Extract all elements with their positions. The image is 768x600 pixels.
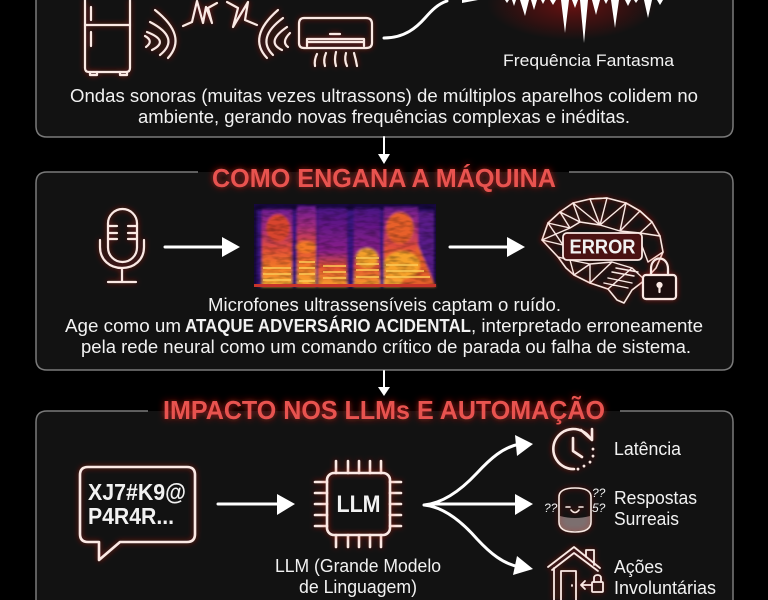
text: how it fools the machine description: , interpretado erroneamente: [471, 316, 703, 336]
icon: confused smart speaker: ??: [592, 486, 606, 500]
arrow: to phantom frequency: [384, 0, 478, 38]
label: respostas surreais: Surreais: [614, 509, 679, 529]
icon: lock: [643, 258, 676, 299]
icon: sound waves from refrigerator: [145, 10, 176, 58]
icon: confused smart speaker: [544, 486, 606, 532]
arrow: panel 1 to panel 2: [378, 137, 390, 164]
panel: how it fools the machine: [36, 163, 733, 370]
icon: LLM chip: LLM: [336, 491, 380, 518]
label: ações involuntárias: Ações: [614, 557, 663, 577]
text: how it fools the machine description: [65, 295, 703, 357]
ERROR tag: ERROR: [570, 236, 636, 258]
arrow: spectrogram to brain: [450, 237, 525, 257]
icon: garbled text speech bubble: [80, 467, 195, 560]
text: how it fools the machine description: Age como um: [65, 316, 181, 336]
icon: LLM chip: [315, 461, 401, 547]
text: how it fools the machine description: pela rede neural como um comando crítico de parada ou falha de sistema.: [81, 337, 691, 357]
text: phantom frequency description: Ondas sonoras (muitas vezes ultrassons) de múltiplos aparelhos colidem no: [70, 86, 698, 106]
label: ações involuntárias: Involuntárias: [614, 578, 716, 598]
icon: garbled text speech bubble: P4R4R...: [88, 503, 174, 529]
icon: garbled text speech bubble: XJ7#K9@: [88, 479, 186, 505]
label: LLM: de Linguagem): [299, 577, 417, 597]
arrow: panel 2 to panel 3: [378, 371, 390, 396]
icon: confused smart speaker: 5?: [592, 501, 606, 515]
text: phantom frequency description: ambiente, gerando novas frequências complexas e inéditas.: [138, 107, 630, 127]
icon: confused smart speaker: ??: [544, 501, 558, 515]
label: ações involuntárias: [614, 557, 716, 598]
icon: house with lock: [548, 547, 603, 600]
arrow: text to LLM: [218, 494, 295, 515]
label: latência: Latência: [614, 439, 682, 459]
heading: como engana a máquina: COMO ENGANA A MÁQUINA: [212, 163, 556, 193]
icon: refrigerator: [85, 0, 130, 75]
heading: impacto nos LLMs e automação: IMPACTO NOS LLMs E AUTOMAÇÃO: [163, 395, 605, 425]
icon: air conditioner: [299, 18, 372, 66]
icon: colliding sound spikes: [183, 1, 257, 27]
text: how it fools the machine description: Microfones ultrassensíveis captam o ruído.: [208, 295, 561, 315]
arrows: LLM to three outcomes: [424, 435, 533, 575]
label: LLM: [275, 556, 441, 597]
label: phantom frequency: Frequência Fantasma: [503, 51, 675, 70]
panel: how phantom frequency forms: [36, 0, 733, 137]
label: LLM: LLM (Grande Modelo: [275, 556, 441, 576]
text: how it fools the machine description: ATAQUE ADVERSÁRIO ACIDENTAL: [185, 315, 471, 336]
label: respostas surreais: [614, 488, 697, 529]
arrow: microphone to spectrogram: [165, 237, 240, 257]
icon: neural network brain with error: [542, 198, 676, 303]
chart: spectrogram: [254, 204, 436, 287]
icon: microphone: [100, 209, 144, 282]
icon: sound waves from air conditioner: [259, 10, 290, 58]
panel: impact on LLMs and automation: [36, 395, 733, 600]
text: phantom frequency description: [70, 86, 698, 127]
label: respostas surreais: Respostas: [614, 488, 697, 508]
icon: clock: [553, 429, 593, 469]
chart: phantom frequency waveform: [487, 0, 663, 43]
